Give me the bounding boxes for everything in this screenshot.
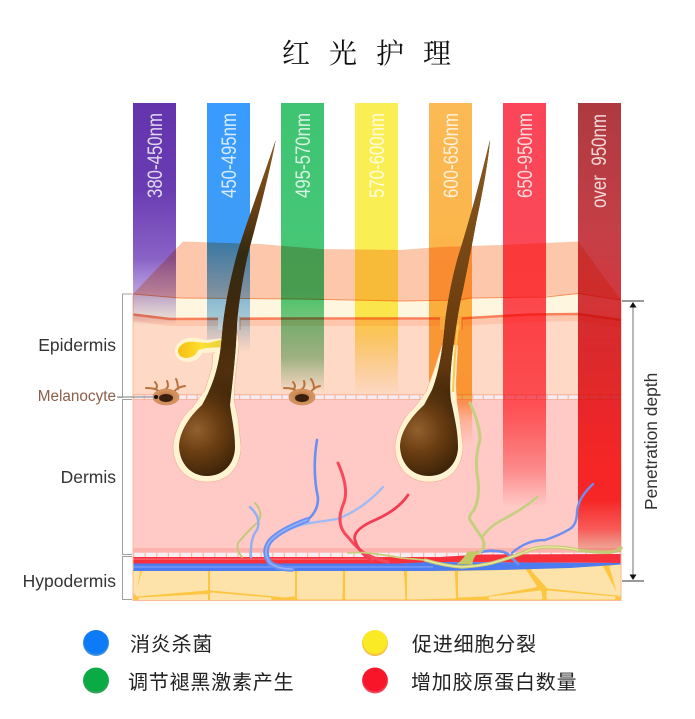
wavelength labels [144, 113, 611, 208]
label: Dermis: Dermis [61, 467, 116, 487]
wavelength labels: 600-650nm [440, 113, 463, 198]
hair shaft and bulb [400, 140, 490, 476]
follicle notch left [218, 316, 240, 330]
red vessel band [133, 554, 621, 564]
hair shaft and bulb [179, 140, 276, 476]
legend [83, 630, 577, 694]
bar: 600-650nm [429, 103, 472, 445]
horizontal green nerve [348, 552, 425, 560]
legend: yellow: 促进细胞分裂 [412, 633, 537, 656]
long green nerve [468, 403, 484, 557]
label: Hypodermis: Hypodermis [23, 571, 116, 591]
hair shaft shading [424, 140, 490, 405]
follicle cream sheath [173, 335, 241, 482]
orange lower band [133, 318, 621, 325]
back wall of skin block [133, 242, 621, 301]
legend: yellow [362, 630, 537, 656]
red vessel one [338, 463, 388, 562]
follicle cream sheath [395, 345, 463, 482]
epidermis layer [133, 310, 621, 400]
label: Penetration depth: Penetration depth [641, 373, 661, 510]
vessels and nerves [238, 403, 621, 569]
large blue vessel [266, 440, 318, 569]
wavelength labels: 450-495nm [218, 113, 241, 198]
follicle notch right [440, 316, 462, 330]
small green nerve [238, 503, 260, 557]
label: Melanocyte: Melanocyte [38, 388, 116, 405]
bar: 450-495nm [207, 103, 250, 352]
bar: over 950nm [578, 103, 621, 552]
yellow sheath edge [453, 325, 458, 392]
skin outline [133, 294, 621, 600]
wavelength labels: 650-950nm [514, 113, 537, 198]
legend: red: 增加胶原蛋白数量 [411, 671, 577, 694]
bar: 495-570nm [281, 103, 324, 392]
basal membrane lower [133, 553, 621, 557]
blue vessel band [133, 562, 621, 571]
legend: blue: 消炎杀菌 [130, 633, 213, 656]
red vessel two [355, 495, 408, 561]
skin cross-section [133, 242, 621, 600]
legend: green [83, 668, 294, 694]
legend: blue [83, 630, 213, 656]
cream surface band [133, 294, 621, 320]
legend: red [362, 668, 577, 694]
sebaceous gland [178, 339, 224, 358]
layer brackets [118, 294, 132, 600]
dermis layer [133, 399, 621, 549]
fat layer [133, 562, 621, 600]
title: 红光护理 [282, 38, 470, 70]
wavelength labels: 495-570nm [292, 113, 315, 198]
basal membrane upper [133, 395, 621, 399]
sebaceous gland outline [175, 338, 226, 362]
label: Epidermis: Epidermis [38, 335, 116, 355]
right blue vessel [475, 551, 518, 564]
melanocyte pointer [117, 395, 158, 399]
hair shaft shading [202, 140, 276, 405]
hair follicle right [395, 140, 490, 482]
melanocyte right [284, 379, 320, 405]
bar: 570-600nm [355, 103, 398, 396]
bar: 380-450nm [133, 103, 176, 325]
wavelength labels: over 950nm [588, 114, 611, 208]
small blue vessel [250, 507, 258, 557]
penetration depth arrow [622, 301, 644, 581]
hair follicle left [173, 140, 276, 482]
blue branch [282, 487, 383, 533]
wavelength bars [133, 103, 621, 552]
wavelength labels: 570-600nm [366, 113, 389, 198]
nerve junction [458, 552, 478, 564]
wavelength labels: 380-450nm [144, 113, 167, 198]
bar: 650-950nm [503, 103, 546, 506]
legend: green: 调节褪黑激素产生 [128, 671, 294, 694]
surface orange line [133, 294, 621, 301]
melanocyte left [146, 379, 185, 405]
